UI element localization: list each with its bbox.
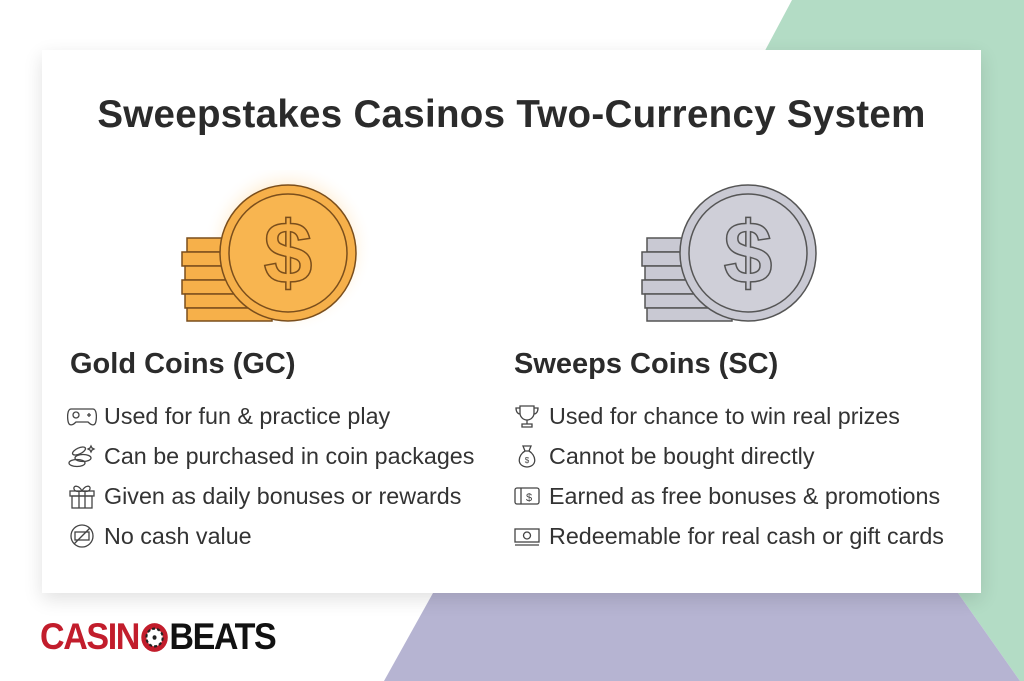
icon: gold coin: $ [264, 203, 312, 302]
item: ticket: Earned as free bonuses & promotions [549, 483, 940, 509]
logo: casinobeats [40, 616, 276, 657]
icon: gold coin [181, 174, 362, 322]
item: prizes: Used for chance to win real prizes [549, 403, 900, 429]
item: ticket: $ [526, 492, 532, 504]
title: Sweepstakes Casinos Two-Currency System [97, 93, 926, 136]
logo: casinobeats: CASIN [40, 616, 139, 657]
card [42, 50, 981, 593]
heading: gold coins: Gold Coins (GC) [70, 348, 296, 380]
item: money bag: Cannot be bought directly [549, 443, 815, 469]
heading: sweeps coins: Sweeps Coins (SC) [514, 348, 778, 380]
icon: silver coin [641, 184, 817, 322]
item: purchase: Can be purchased in coin packages [104, 443, 474, 469]
item: money bag: $ [525, 456, 530, 465]
logo: casinobeats: BEATS [169, 616, 275, 657]
item: gift: Given as daily bonuses or rewards [104, 483, 461, 509]
icon: silver coin: $ [724, 203, 772, 302]
item: no cash: No cash value [104, 523, 252, 549]
list: gold coins [67, 403, 474, 549]
list: sweeps coins [514, 403, 944, 549]
item: fun: Used for fun & practice play [104, 403, 390, 429]
item: cash: Redeemable for real cash or gift cards [549, 523, 944, 549]
